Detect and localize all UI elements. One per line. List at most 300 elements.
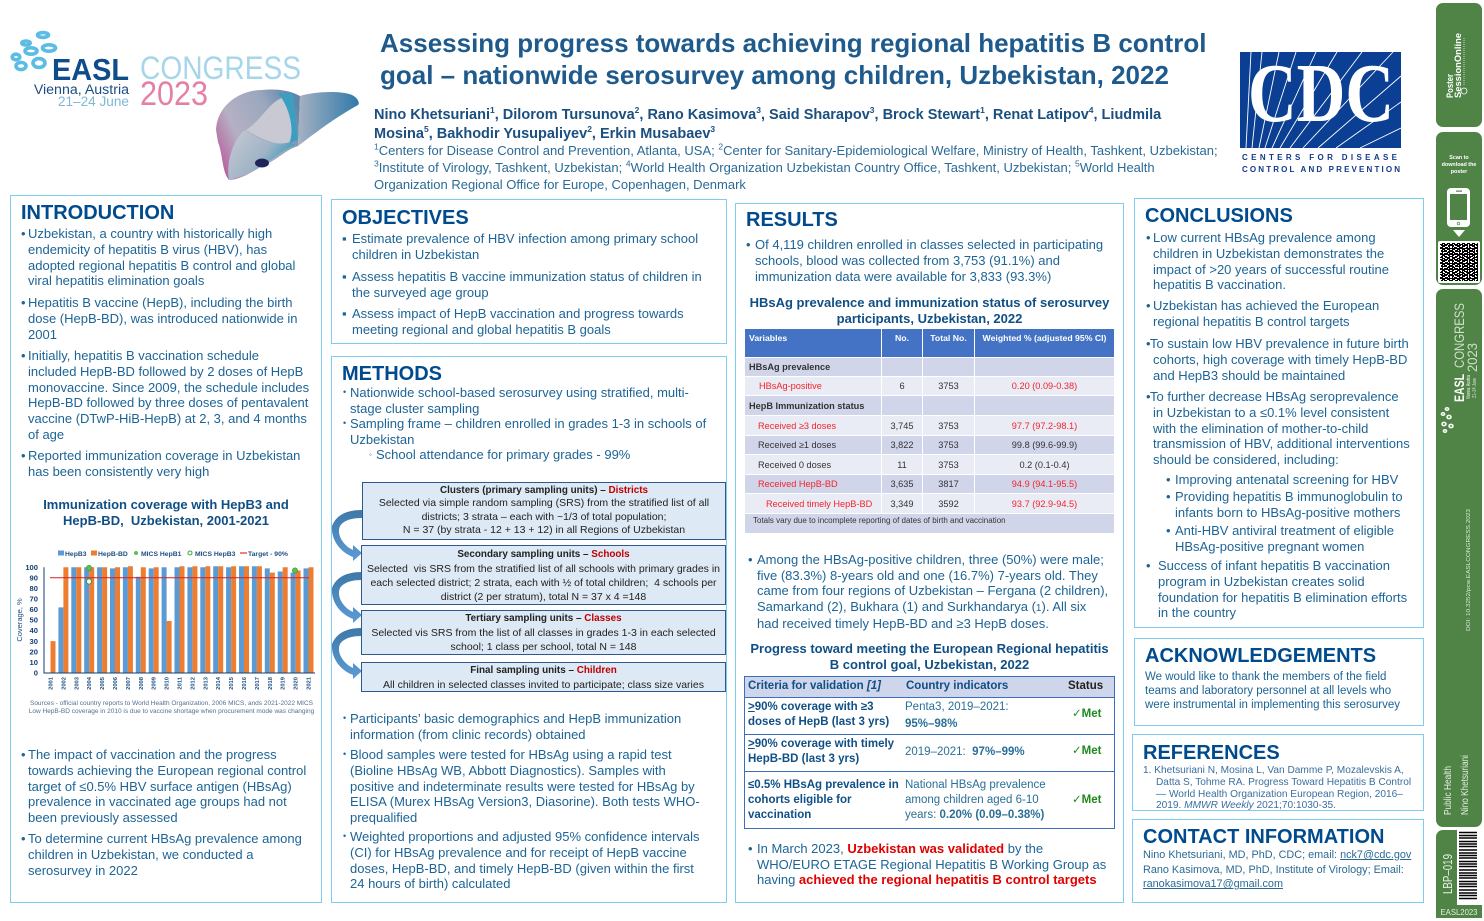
bar chart: immunization coverage: 2006: [113, 676, 119, 690]
bar chart: immunization coverage: 2005: [100, 676, 106, 690]
text: objective 2: Assess hepatitis B vaccine immunization status of children in: [352, 269, 702, 284]
heading: results: RESULTS: [746, 209, 838, 231]
table: HBsAg prevalence and immunization: Total No.: [930, 333, 967, 343]
logo: EASL Congress 2023 with liver: EASL: [52, 52, 129, 87]
bar chart: immunization coverage: 2003: [74, 676, 80, 690]
text: methods sub-bullet: School attendance for primary grades - 99%: [376, 447, 630, 462]
chart legend: [58, 550, 288, 558]
bar chart: immunization coverage: 2007: [126, 677, 132, 690]
text: objective 1: [342, 231, 698, 262]
text: validation outcome: [748, 841, 1106, 887]
text: conclusion 2: regional hepatitis B control targets: [1153, 314, 1350, 329]
bar chart: immunization coverage: 2010: [165, 677, 171, 690]
table row 1: [745, 698, 1114, 735]
text: conclusion 3: [1146, 336, 1409, 383]
table row 1: >90% coverage with ≥3: [748, 700, 874, 712]
table: HBsAg prevalence and immunization: 3753: [938, 440, 959, 450]
bar chart: immunization coverage: 2012: [190, 677, 196, 690]
bar chart: immunization coverage: 2015: [229, 676, 235, 690]
chart legend: MICS HepB3: [195, 551, 236, 558]
table: HBsAg prevalence and immunization: 3,635: [890, 479, 914, 489]
table title: HBsAg prevalence: HBsAg prevalence and immunization status of serosurvey: [750, 295, 1109, 310]
sidebar panel: EASL congress details: Vienna, Austria: [1466, 375, 1472, 399]
sidebar tab: scan to download: download the: [1442, 162, 1476, 168]
text: enrolment summary: Of 4,119 children enrolled in classes selected in participating: [755, 237, 1103, 252]
text: bullet 3: HepB-BD followed by three doses of pentavalent: [28, 395, 308, 410]
panel: conclusions: [1134, 198, 1424, 628]
text: HBsAg-positive children: Among the HBsAg-positive children, three (50%) were male;: [757, 552, 1104, 567]
text: HBsAg-positive children: came from four regions of Uzbekistan – Fergana (2 children),: [757, 583, 1108, 598]
flow box: schools: [361, 545, 726, 605]
bar chart: immunization coverage: 2020: [294, 677, 300, 690]
flow box: schools: Selected vis SRS from the stratified list of all schools with primary grades in: [367, 563, 720, 575]
bar chart: immunization coverage: 2016: [242, 676, 248, 690]
table row 3: vaccination: [748, 809, 811, 821]
logo: CDC: [1240, 48, 1401, 174]
table: HBsAg prevalence and immunization: Weighted % (adjusted 95% CI): [983, 333, 1106, 343]
table header row: Criteria for validation [1]: [748, 680, 881, 692]
authors: Nino Khetsuriani1, Dilorom Tursunova2, Rano Kasimova3, Said Sharapov3, Brock Stewart1, Renat Latipov4, Liudmila: [374, 105, 1161, 123]
heading: acknowledgements: ACKNOWLEDGEMENTS: [1145, 645, 1376, 667]
panel: acknowledgements: [1134, 638, 1424, 726]
text: methods bullet 3: Participants’ basic demographics and HepB immunization: [350, 711, 681, 726]
text: conclusion 5: Success of infant hepatitis B vaccination: [1158, 558, 1390, 573]
table row 2: >90% coverage with timely: [748, 738, 894, 750]
text: bullet 6: serosurvey in 2022: [28, 863, 138, 878]
table: HBsAg prevalence and immunization: 11: [897, 460, 907, 470]
sidebar tab: poster session online: [1436, 3, 1482, 127]
affiliations: Organization Regional Office for Europe, Copenhagen, Denmark: [374, 177, 746, 192]
text: sub-bullet antiviral: Anti-HBV antiviral treatment of eligible: [1175, 523, 1394, 538]
text: validation outcome: having achieved the regional hepatitis B control targets: [757, 872, 1097, 887]
text: methods bullet 4: ELISA (Murex HBsAg Version3, Diasorine). Both tests WHO-: [350, 794, 700, 809]
text: HBsAg-positive children: Samarkand (2), Bukhara (1) and Surkhandarya (1). All six: [757, 598, 1086, 614]
text: HBsAg-positive children: had received timely HepB-BD and ≥3 HepB doses.: [757, 616, 1049, 631]
logo: CDC: CONTROL AND PREVENTION: [1242, 165, 1400, 174]
text: reference 1: 1. Khetsuriani N, Mosina L, Van Damme P, Mozalevskis A,: [1143, 765, 1404, 776]
chart title: Immunization coverage with HepB3 and: [43, 497, 289, 512]
text: sub-bullet antiviral: HBsAg-positive pregnant women: [1175, 539, 1364, 554]
bar chart: immunization coverage: 2002: [61, 677, 67, 690]
text: sub-bullet antenatal: Improving antenatal screening for HBV: [1175, 472, 1398, 487]
bar chart: immunization coverage: 20: [30, 647, 38, 656]
bar chart: immunization coverage: 2021: [306, 676, 312, 690]
text: reference 1: — World Health Organization European Region, 2016–: [1156, 789, 1403, 800]
text: conclusion 3: cohorts, high coverage with timely HepB-BD: [1153, 352, 1407, 367]
flow box: clusters: N = 37 (by strata - 12 + 13 + 12) in all Regions of Uzbekistan: [403, 524, 685, 536]
chart source note: Low HepB-BD coverage in 2010 is due to vaccine shortage when procurement mode was changing: [29, 708, 315, 715]
text: conclusion 5: [1146, 558, 1407, 620]
bar chart: immunization coverage: 2004: [87, 676, 93, 690]
text: conclusion 1: impact of >20 years of successful routine: [1153, 262, 1389, 277]
bar chart: immunization coverage: 2014: [216, 676, 222, 690]
sidebar tab: poster ID and barcode: [1436, 830, 1482, 918]
sidebar tab: scan to download: [1436, 132, 1482, 285]
logo: EASL Congress 2023 with liver: 2023: [140, 75, 208, 113]
table: HBsAg prevalence and immunization: Totals vary due to incomplete reporting of dates of birth and vaccination: [753, 516, 1006, 525]
logo: EASL Congress 2023 with liver: CONGRESS: [140, 50, 301, 86]
text: bullet 1: endemicity of hepatitis B virus (HBV), has: [28, 242, 267, 257]
table title: HBsAg prevalence: [750, 295, 1110, 326]
sidebar panel: EASL congress details: Nino Khetsuriani: [1459, 755, 1471, 815]
panel: conclusions: •: [1146, 389, 1151, 404]
table: HBsAg prevalence and immunization: 3592: [938, 498, 959, 508]
text: methods bullet 2: Sampling frame – children enrolled in grades 1-3 in schools of: [350, 416, 706, 431]
text: methods bullet 4: [343, 747, 700, 825]
authors: Mosina5, Bakhodir Yusupaliyev2, Erkin Musabaev3: [374, 124, 715, 142]
affiliations: [374, 142, 1218, 192]
text: enrolment summary: immunization data were available for 3,833 (93.3%): [755, 269, 1051, 284]
flow box: children: All children in selected classes invited to participate; class size varies: [383, 679, 704, 691]
heading: objectives: OBJECTIVES: [342, 207, 469, 229]
text: sub-bullet immunoglobulin: [1166, 489, 1403, 520]
text: sub-bullet immunoglobulin: infants born to HBsAg-positive mothers: [1175, 505, 1400, 520]
text: bullet 6: To determine current HBsAg prevalence among: [28, 831, 302, 846]
heading: contact information: CONTACT INFORMATION: [1143, 826, 1384, 848]
table row 2: [745, 735, 1114, 772]
text: bullet 5: The impact of vaccination and the progress: [28, 747, 277, 762]
text: conclusion 4: in Uzbekistan to a ≤0.1% level consistent: [1153, 405, 1389, 420]
sidebar: green poster strip: [1430, 0, 1484, 921]
panel: results: •: [748, 841, 753, 856]
text: acknowledgements: We would like to thank the members of the field: [1145, 671, 1386, 683]
text: HBsAg-positive children: five (83.3%) 8-years old and one (16.7%) 7-years old. They: [757, 568, 1098, 582]
table: HBsAg prevalence and immunization: 3,349: [890, 498, 914, 508]
text: bullet 6: children in Uzbekistan, we conducted a: [28, 847, 253, 862]
panel: results: •: [748, 552, 753, 567]
text: methods bullet 2: [343, 416, 706, 447]
text: bullet 3: vaccine (DTwP-HiB-HepB) at 2, 3, and 4 months: [28, 411, 307, 426]
bar chart: immunization coverage: 0: [34, 668, 38, 677]
text: conclusion 1: Low current HBsAg prevalence among: [1153, 230, 1376, 245]
text: sub-bullet antiviral: [1166, 523, 1394, 554]
bar chart: immunization coverage: 10: [30, 658, 38, 667]
text: bullet 5: been previously assessed: [28, 810, 178, 825]
bar chart: immunization coverage: 100: [25, 563, 38, 572]
text: methods bullet 1: Nationwide school-based serosurvey using stratified, multi-: [350, 385, 689, 400]
text: acknowledgements: were instrumental in implementing this serosurvey: [1145, 699, 1400, 711]
panel: conclusions: •: [1146, 336, 1151, 351]
bar chart: immunization coverage: [15, 550, 315, 715]
table row 3: National HBsAg prevalence: [905, 779, 1046, 791]
table: HBsAg prevalence and immunization: 99.8 (99.6-99.9): [1012, 440, 1077, 450]
table: HBsAg prevalence and immunization: 94.9 (94.1-95.5): [1012, 479, 1077, 489]
text: validation outcome: In March 2023, Uzbekistan was validated by the: [757, 841, 1043, 856]
table: validation criteria: [744, 676, 1115, 829]
QR code: [1438, 241, 1480, 283]
text: conclusion 1: children in Uzbekistan demonstrates the: [1153, 246, 1384, 261]
flow box: schools: district (2 per stratum), total N = 37 x 4 =148: [441, 591, 646, 603]
text: methods bullet 4: Blood samples were tested for HBsAg using a rapid test: [350, 747, 672, 762]
text: bullet 2: 2001: [28, 327, 57, 342]
title: [380, 28, 1206, 90]
flow box: clusters: [362, 482, 726, 540]
flow box: schools: Secondary sampling units – Schools: [457, 549, 630, 560]
table header row: Country indicators: [906, 680, 1008, 692]
flow box: classes: [361, 610, 726, 655]
text: objective 1: Estimate prevalence of HBV infection among primary school: [352, 231, 698, 246]
heading: references: REFERENCES: [1143, 742, 1280, 764]
chart legend: HepB3: [65, 551, 87, 558]
flow box: classes: school; 1 class per school, total N = 148: [451, 641, 636, 653]
icon: smartphone: [1447, 188, 1470, 227]
text: methods bullet 4: positive and indeterminate results were tested for HBsAg by: [350, 779, 695, 794]
text: bullet 5: target of ≤0.5% HBV surface antigen (HBsAg): [28, 779, 292, 794]
arrows: sampling flow: [332, 510, 362, 679]
text: conclusion 1: hepatitis B vaccination.: [1153, 277, 1286, 292]
table row 1: Penta3, 2019–2021:: [905, 701, 1009, 713]
table: HBsAg prevalence and immunization: 3,745: [890, 420, 914, 430]
table title: progress toward goal: B control goal, Uzbekistan, 2022: [830, 656, 1029, 672]
table: HBsAg prevalence and immunization: HBsAg prevalence: [749, 362, 830, 372]
text: bullet 3: Initially, hepatitis B vaccination schedule: [28, 348, 259, 363]
title: Assessing progress towards achieving regional hepatitis B control: [380, 28, 1206, 58]
chart title: [43, 497, 289, 528]
text: conclusion 4: with the elimination of mother-to-child: [1153, 421, 1368, 436]
table row 1: 95%–98%: [905, 718, 957, 730]
text: conclusion 5: program in Uzbekistan creates solid: [1158, 574, 1365, 589]
text: conclusion 4: transmission of HBV, additional interventions: [1153, 436, 1410, 451]
bar chart: immunization coverage: 80: [30, 584, 38, 593]
affiliations: 1Centers for Disease Control and Prevention, Atlanta, USA; 2Center for Sanitary-Epidemiological Welfare, Ministry of Health, Tashkent, Uzbekistan;: [374, 142, 1218, 158]
panel: conclusions: •: [1146, 298, 1151, 313]
sidebar tab: poster ID and barcode: EASL2023: [1440, 908, 1478, 917]
table: HBsAg prevalence and immunization: 3753: [938, 381, 959, 391]
panel: contact information: [1132, 819, 1424, 903]
panel: methods: •: [343, 831, 346, 841]
bar chart: immunization coverage: Coverage, %: [15, 598, 24, 642]
table: HBsAg prevalence and immunization: Received HepB-BD: [758, 479, 838, 489]
text: objective 1: children in Uzbekistan: [352, 246, 479, 262]
panel: objectives: ▪: [342, 306, 347, 321]
table header row: [745, 677, 1114, 698]
panel: objectives: [331, 199, 727, 344]
panel: results: •: [746, 237, 751, 252]
heading: introduction: INTRODUCTION: [21, 202, 174, 224]
flow box: schools: each selected district; 2 strata, each with ½ of total children; 4 schools per: [370, 577, 717, 589]
text: bullet 2: [21, 295, 298, 342]
table: HBsAg prevalence and immunization: Received 0 doses: [758, 460, 831, 470]
text: objective 2: [342, 269, 702, 300]
table: HBsAg prevalence and immunization: 0.2 (0.1-0.4): [1019, 460, 1070, 470]
chart legend: Target - 90%: [248, 551, 288, 558]
text: methods bullet 1: [343, 385, 689, 416]
text: methods bullet 5: [343, 829, 700, 891]
panel: methods: •: [343, 713, 346, 723]
table: HBsAg prevalence and immunization: 0.20 (0.09-0.38): [1012, 381, 1077, 391]
table: HBsAg prevalence and immunization: Received timely HepB-BD: [766, 498, 872, 508]
text: acknowledgements: teams and laboratory personnel at all levels who: [1145, 685, 1391, 697]
chart legend: MICS HepB1: [141, 551, 182, 558]
bar chart: immunization coverage: 2008: [139, 676, 145, 690]
text: methods bullet 2: Uzbekistan: [350, 432, 414, 447]
sidebar tab: poster session online: SessionOnline: [1453, 33, 1463, 98]
text: reference 1: [1143, 765, 1411, 811]
sidebar tab: poster ID and barcode: LBP–019: [1440, 854, 1455, 894]
bar chart: immunization coverage: 2001: [48, 676, 54, 690]
panel: introduction: [10, 195, 322, 903]
panel: conclusions: •: [1166, 489, 1171, 504]
table: HBsAg prevalence and immunization: 6: [899, 381, 905, 391]
bar chart: immunization coverage: 40: [30, 626, 38, 635]
text: methods bullet 4: prequalified: [350, 810, 417, 825]
flow box: children: Final sampling units – Children: [470, 665, 617, 676]
table header row: Status: [1068, 680, 1103, 692]
sidebar panel: EASL congress details: 2023: [1464, 343, 1480, 372]
panel: introduction: •: [21, 747, 26, 762]
text: conclusion 2: Uzbekistan has achieved the European: [1153, 298, 1379, 313]
text: methods bullet 3: [343, 711, 681, 742]
panel: introduction: •: [21, 348, 26, 363]
panel: introduction: •: [21, 226, 26, 241]
text: objective 3: meeting regional and global hepatitis B goals: [352, 322, 611, 336]
text: bullet 2: dose (HepB-BD), was introduced nationwide in: [28, 311, 298, 326]
panel: objectives: ▪: [342, 231, 347, 246]
table: HBsAg prevalence and immunization: No.: [895, 333, 909, 343]
text: bullet 1: viral hepatitis elimination goals: [28, 273, 204, 288]
text: bullet 3: of age: [28, 427, 64, 442]
panel: conclusions: •: [1146, 230, 1151, 245]
table title: progress toward goal: [750, 641, 1109, 672]
text: contact details: ranokasimova17@gmail.com: [1143, 878, 1283, 890]
text: validation outcome: WHO/EURO ETAGE Regional Hepatitis B Working Group as: [757, 856, 1106, 872]
bar chart: immunization coverage: 90: [30, 574, 38, 582]
flow box: clusters: Selected via simple random sampling (SRS) from the stratified list of all: [379, 497, 709, 509]
table row 3: cohorts eligible for: [748, 794, 852, 806]
flow box: clusters: Clusters (primary sampling units) – Districts: [440, 485, 648, 496]
text: bullet 4: [21, 448, 300, 479]
sidebar panel: EASL congress details: DOI: 10.3252/pcw.EASLCONGRESS.2023: [1466, 509, 1472, 631]
text: methods bullet 5: Weighted proportions and adjusted 95% confidence intervals: [350, 829, 700, 844]
panel: introduction: •: [21, 295, 26, 310]
text: conclusion 1: [1146, 230, 1389, 292]
bar chart: immunization coverage: 2009: [152, 676, 158, 690]
text: bullet 4: Reported immunization coverage in Uzbekistan: [28, 448, 300, 463]
text: methods bullet 5: 24 hours of birth) calculated: [350, 876, 510, 891]
chart source note: Sources - official country reports to World Health Organization, 2006 MICS, ands 2021-2022 MICS: [30, 700, 314, 707]
sidebar tab: scan to download: poster: [1451, 169, 1468, 175]
text: reference 1: Datta S, Tohme RA. Progress Toward Hepatitis B Control: [1156, 777, 1411, 788]
sidebar panel: EASL congress details: CONGRESS: [1451, 303, 1467, 368]
panel: methods: ◦: [369, 450, 372, 459]
text: methods bullet 5: (CI) for HBsAg prevalence and for receipt of HepB vaccine: [350, 845, 687, 860]
table: HBsAg prevalence and immunization: Received ≥3 doses: [758, 420, 836, 430]
panel: methods: [331, 356, 727, 903]
sidebar panel: EASL congress details: EASL: [1451, 374, 1467, 402]
text: methods bullet 4: (Bioline HBsAg WB, Abbott Diagnostics). Samples with: [350, 763, 666, 778]
authors: [374, 105, 1162, 142]
table: HBsAg prevalence and immunization: Received ≥1 doses: [758, 440, 836, 450]
flow box: clusters: districts; 3 strata – each with ~1/3 of total population;: [422, 511, 666, 523]
text: bullet 2: Hepatitis B vaccine (HepB), including the birth: [28, 295, 292, 310]
panel: introduction: •: [21, 448, 26, 463]
table row 3: ✓Met: [1072, 794, 1101, 806]
sidebar tab: poster session online: Poster: [1445, 74, 1455, 98]
affiliations: 3Institute of Virology, Tashkent, Uzbekistan; 4World Health Organization Uzbekistan Country Office, Tashkent, Uzbekistan; 5World Health: [374, 159, 1155, 175]
bar chart: immunization coverage: 50: [30, 616, 38, 625]
text: HBsAg-positive children: [748, 552, 1108, 631]
text: objective 3: [342, 306, 684, 336]
panel: introduction: •: [21, 831, 26, 846]
panel: methods: •: [343, 387, 346, 397]
text: enrolment summary: [746, 237, 1103, 284]
text: bullet 1: [21, 226, 295, 288]
text: conclusion 5: foundation for hepatitis B elimination efforts: [1158, 590, 1407, 605]
panel: conclusions: •: [1166, 523, 1171, 538]
text: methods bullet 3: information (from clinic records) obtained: [350, 727, 586, 742]
table title: progress toward goal: Progress toward meeting the European Regional hepatitis: [750, 641, 1109, 656]
bar chart: immunization coverage: 70: [30, 595, 38, 604]
table row 3: years: 0.20% (0.09–0.38%): [905, 809, 1044, 821]
sidebar panel: EASL congress details: Public Health: [1442, 766, 1454, 815]
text: bullet 5: prevalence in vaccinated age groups had not: [28, 794, 287, 809]
table row 1: doses of HepB (last 3 yrs): [748, 716, 889, 728]
flow box: classes: Tertiary sampling units – Classes: [465, 613, 622, 624]
sidebar panel: EASL congress details: 21–24 June: [1472, 378, 1478, 398]
text: methods bullet 1: stage cluster sampling: [350, 401, 479, 416]
table: HBsAg prevalence and immunization: 93.7 (92.9-94.5): [1012, 498, 1077, 508]
text: bullet 3: [21, 348, 309, 442]
panel: methods: •: [343, 749, 346, 759]
text: methods bullet 5: doses, HepB-BD, and timely HepB-BD (given within the first: [350, 861, 694, 876]
table: HBsAg prevalence and immunization: [745, 329, 1114, 533]
text: objective 2: the surveyed age group: [352, 284, 489, 300]
table row 2: HepB-BD (last 3 yrs): [748, 752, 859, 764]
table row 2: ✓Met: [1072, 745, 1101, 757]
table row 3: [748, 779, 1102, 821]
text: conclusion 4: [1146, 389, 1410, 467]
text: bullet 5: towards achieving the European regional control: [28, 763, 306, 778]
table title: HBsAg prevalence: participants, Uzbekistan, 2022: [837, 310, 1022, 326]
text: objective 3: Assess impact of HepB vaccination and progress towards: [352, 306, 684, 321]
table: HBsAg prevalence and immunization: 3,822: [890, 440, 914, 450]
bar chart: immunization coverage: 2018: [268, 676, 274, 690]
text: enrolment summary: schools, blood was collected from 3,753 (91.1%) and: [755, 253, 1060, 268]
chart legend: HepB-BD: [98, 551, 128, 558]
table row 3: among children aged 6-10: [905, 794, 1039, 806]
bar chart: immunization coverage: 2019: [281, 676, 287, 690]
text: bullet 6: [21, 831, 302, 878]
chart title: HepB-BD, Uzbekistan, 2001-2021: [63, 513, 269, 528]
text: contact details: [1143, 848, 1411, 892]
text: conclusion 2: [1146, 298, 1379, 329]
text: contact details: Nino Khetsuriani, MD, PhD, CDC; email: nck7@cdc.gov: [1143, 849, 1411, 861]
table: HBsAg prevalence and immunization: 3753: [938, 420, 959, 430]
panel: conclusions: •: [1166, 472, 1171, 487]
table: HBsAg prevalence and immunization: HepB Immunization status: [749, 400, 864, 410]
panel: results: [735, 203, 1124, 903]
text: conclusion 3: and HepB3 should be maintained: [1153, 368, 1345, 383]
bar chart: immunization coverage: 30: [30, 637, 38, 646]
table: HBsAg prevalence and immunization: 97.7 (97.2-98.1): [1012, 420, 1077, 430]
text: bullet 5: [21, 747, 306, 825]
title: goal – nationwide serosurvey among children, Uzbekistan, 2022: [380, 60, 1169, 90]
text: acknowledgements: [1145, 671, 1400, 711]
text: conclusion 4: should be considered, including:: [1153, 452, 1339, 467]
table row 1: ✓Met: [1072, 708, 1101, 720]
panel: methods: •: [343, 418, 346, 428]
flow box: classes: Selected vis SRS from the list of all classes in grades 1-3 in each selected: [371, 627, 716, 639]
sidebar tab: scan to download: Scan to: [1449, 155, 1469, 161]
text: bullet 1: adopted regional hepatitis B control and global: [28, 258, 295, 273]
panel: conclusions: •: [1146, 558, 1151, 573]
bar chart: immunization coverage: 2017: [255, 677, 261, 690]
table row 3: ≤0.5% HBsAg prevalence in: [748, 779, 899, 791]
text: bullet 1: Uzbekistan, a country with historically high: [28, 226, 272, 241]
text: contact details: Rano Kasimova, MD, PhD, Institute of Virology; Email:: [1143, 864, 1404, 876]
text: conclusion 4: To further decrease HBsAg seroprevalence: [1150, 389, 1399, 404]
table: HBsAg prevalence and immunization: 3753: [938, 460, 959, 470]
